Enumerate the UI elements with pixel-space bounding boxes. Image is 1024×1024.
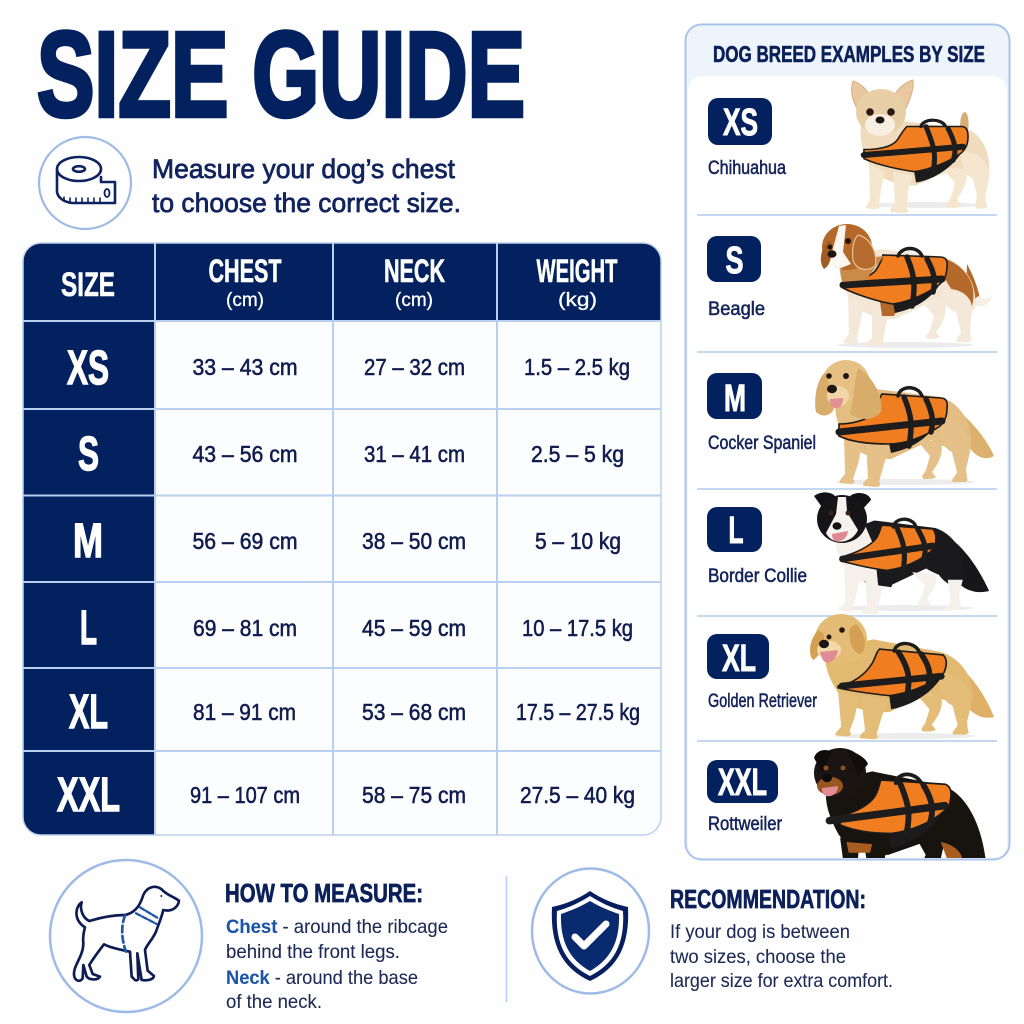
badge: S [707,236,761,282]
dog: Chihuahua in vest [852,80,989,213]
row: L: 69 – 81 cm [193,615,297,641]
row: L: 45 – 59 cm [362,615,466,641]
table header: WEIGHT [536,253,618,289]
icon: measuring tape [39,137,131,229]
dog: Golden Retriever in vest [810,614,994,739]
row: XS [67,342,630,395]
row: XL: 81 – 91 cm [193,699,296,725]
badge: S: S [726,240,744,282]
row: S: 31 – 41 cm [364,441,465,467]
row: M [73,515,621,568]
table header: (kg) [558,290,597,311]
row: XXL: 58 – 75 cm [362,782,466,808]
body text: chest and neck: of the neck. [226,991,322,1013]
breed: Chihuahua: Chihuahua [708,157,786,179]
badge: M [707,373,762,420]
body text: chest and neck: Chest - around the ribcage [226,916,448,938]
row: XS: 1.5 – 2.5 kg [524,354,630,380]
breed: Rottweiler: Rottweiler [708,813,782,835]
breed: Beagle: Beagle [708,298,765,320]
heading: how to measure: HOW TO MEASURE: [225,878,423,908]
row: XS: 33 – 43 cm [192,354,298,380]
row: L [80,602,633,655]
row: XL [69,686,640,739]
row: XXL [57,769,635,822]
row: M: 56 – 69 cm [192,528,298,554]
row: M: 38 – 50 cm [362,528,466,554]
badge: XXL: XXL [718,762,767,804]
badge: M: M [724,378,746,420]
row: XS: XS [67,342,109,395]
badge: L: L [728,510,744,552]
table header: CHEST [208,253,282,289]
dog: Rottweiler in vest [814,748,986,870]
row: L: L [80,602,97,655]
table header: (cm) [395,290,433,311]
badge: XXL [707,760,778,804]
dog: Cocker Spaniel in vest [815,360,994,487]
body text: recommendation: larger size for extra comfort. [670,970,893,992]
row: XXL: 27.5 – 40 kg [520,782,635,808]
row: S: 2.5 – 5 kg [531,441,624,467]
dog: Border Collie in vest [814,492,989,614]
row: M: 5 – 10 kg [535,528,621,554]
row: XL: 17.5 – 27.5 kg [516,699,640,725]
body text: recommendation: two sizes, choose the [670,946,846,968]
row: S: S [78,428,99,481]
size table [23,243,661,835]
row: S [78,428,624,481]
body text: chest and neck [226,916,448,1013]
badge: XS: XS [723,102,758,144]
row: M: M [73,515,103,568]
recommendation block [670,884,893,992]
badge: XL: XL [722,638,756,680]
panel: dog breed examples [686,24,1010,870]
table header: (cm) [226,290,264,311]
row: XL: XL [69,686,108,739]
row: XS: 27 – 32 cm [364,354,465,380]
intro text: Measure your dog’s chest [152,154,455,184]
breed: Cocker Spaniel: Cocker Spaniel [708,432,816,454]
table header [61,253,618,311]
table header: SIZE [61,266,115,304]
row: XXL: XXL [57,769,120,822]
how to measure block [225,878,448,1013]
icon: dog with measuring lines [50,860,202,1012]
intro text [152,154,461,218]
row: XL: 53 – 68 cm [362,699,466,725]
body text: recommendation: If your dog is between [670,921,850,943]
body text: recommendation [670,921,893,992]
row: XXL: 91 – 107 cm [190,782,300,808]
body text: chest and neck: behind the front legs. [226,941,400,963]
title: SIZE GUIDE [37,6,525,142]
body text: chest and neck: Neck - around the base [226,967,418,989]
breed: Border Collie: Border Collie [708,565,807,587]
row: S: 43 – 56 cm [192,441,298,467]
intro text: to choose the correct size. [152,188,461,218]
icon: shield with check [532,868,649,994]
badge: XL [707,634,769,680]
breed: Golden Retriever: Golden Retriever [708,690,817,712]
badge: XS [708,98,772,145]
dog: Beagle in vest [821,224,992,348]
heading: recommendation: RECOMMENDATION: [670,884,866,914]
table header: NECK [384,253,445,289]
badge: L [707,507,762,552]
row: L: 10 – 17.5 kg [522,615,633,641]
